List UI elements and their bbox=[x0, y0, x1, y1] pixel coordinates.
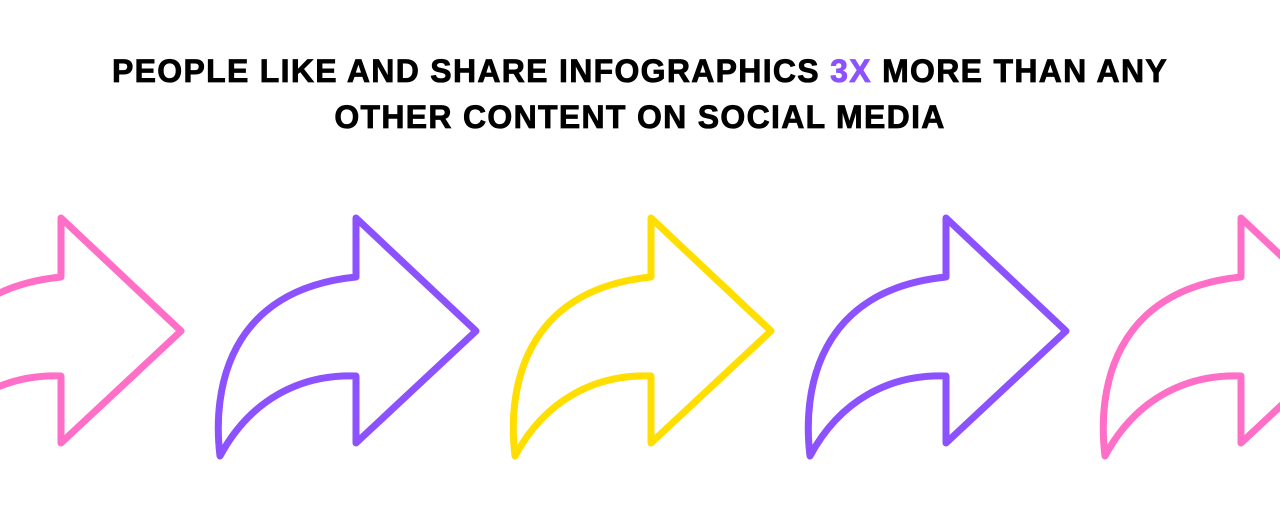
arrow: yellow bbox=[513, 218, 771, 456]
title: OTHER CONTENT ON SOCIAL MEDIA bbox=[334, 99, 946, 135]
arrow: pink right bbox=[1103, 218, 1280, 456]
arrow: purple right bbox=[808, 218, 1066, 456]
arrow: pink left bbox=[0, 218, 181, 456]
title bbox=[112, 53, 1168, 135]
title: PEOPLE LIKE AND SHARE INFOGRAPHICS 3X MORE THAN ANY bbox=[112, 53, 1168, 89]
arrow: purple bbox=[218, 218, 476, 456]
